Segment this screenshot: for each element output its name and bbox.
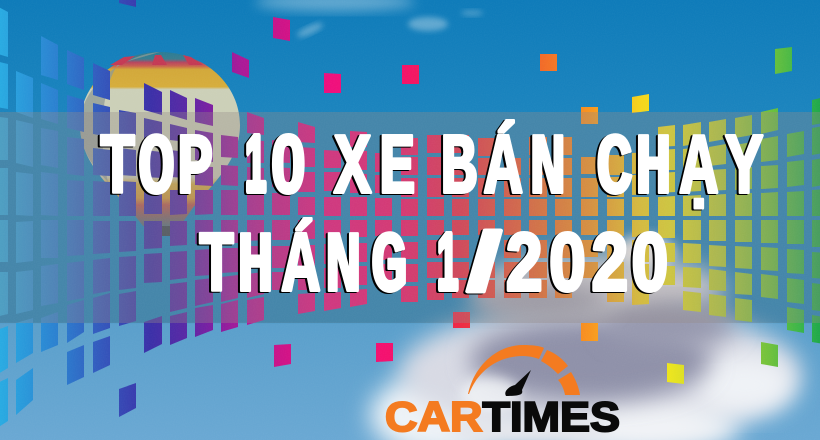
logo gauge needle [505,370,531,396]
logo wordmark: CARTIMES [385,393,620,440]
title: 1 [245,120,266,209]
logo: CarTimes [385,345,620,440]
title: 1 [437,218,458,307]
title: / [467,216,501,308]
title: THÁNG [198,219,408,317]
title: BÁN [440,121,566,219]
translucent title band [0,112,820,323]
title: 0 [271,119,306,210]
clouds: large cumulus [370,236,800,440]
title: XE [334,121,416,219]
title [99,119,763,317]
title: CHẠY [596,121,763,219]
hot air balloon [80,52,240,236]
logo gauge arc [468,345,580,395]
title: TOP [99,121,214,219]
title: 2020 [506,216,668,308]
clouds: upper wisps [255,0,483,40]
